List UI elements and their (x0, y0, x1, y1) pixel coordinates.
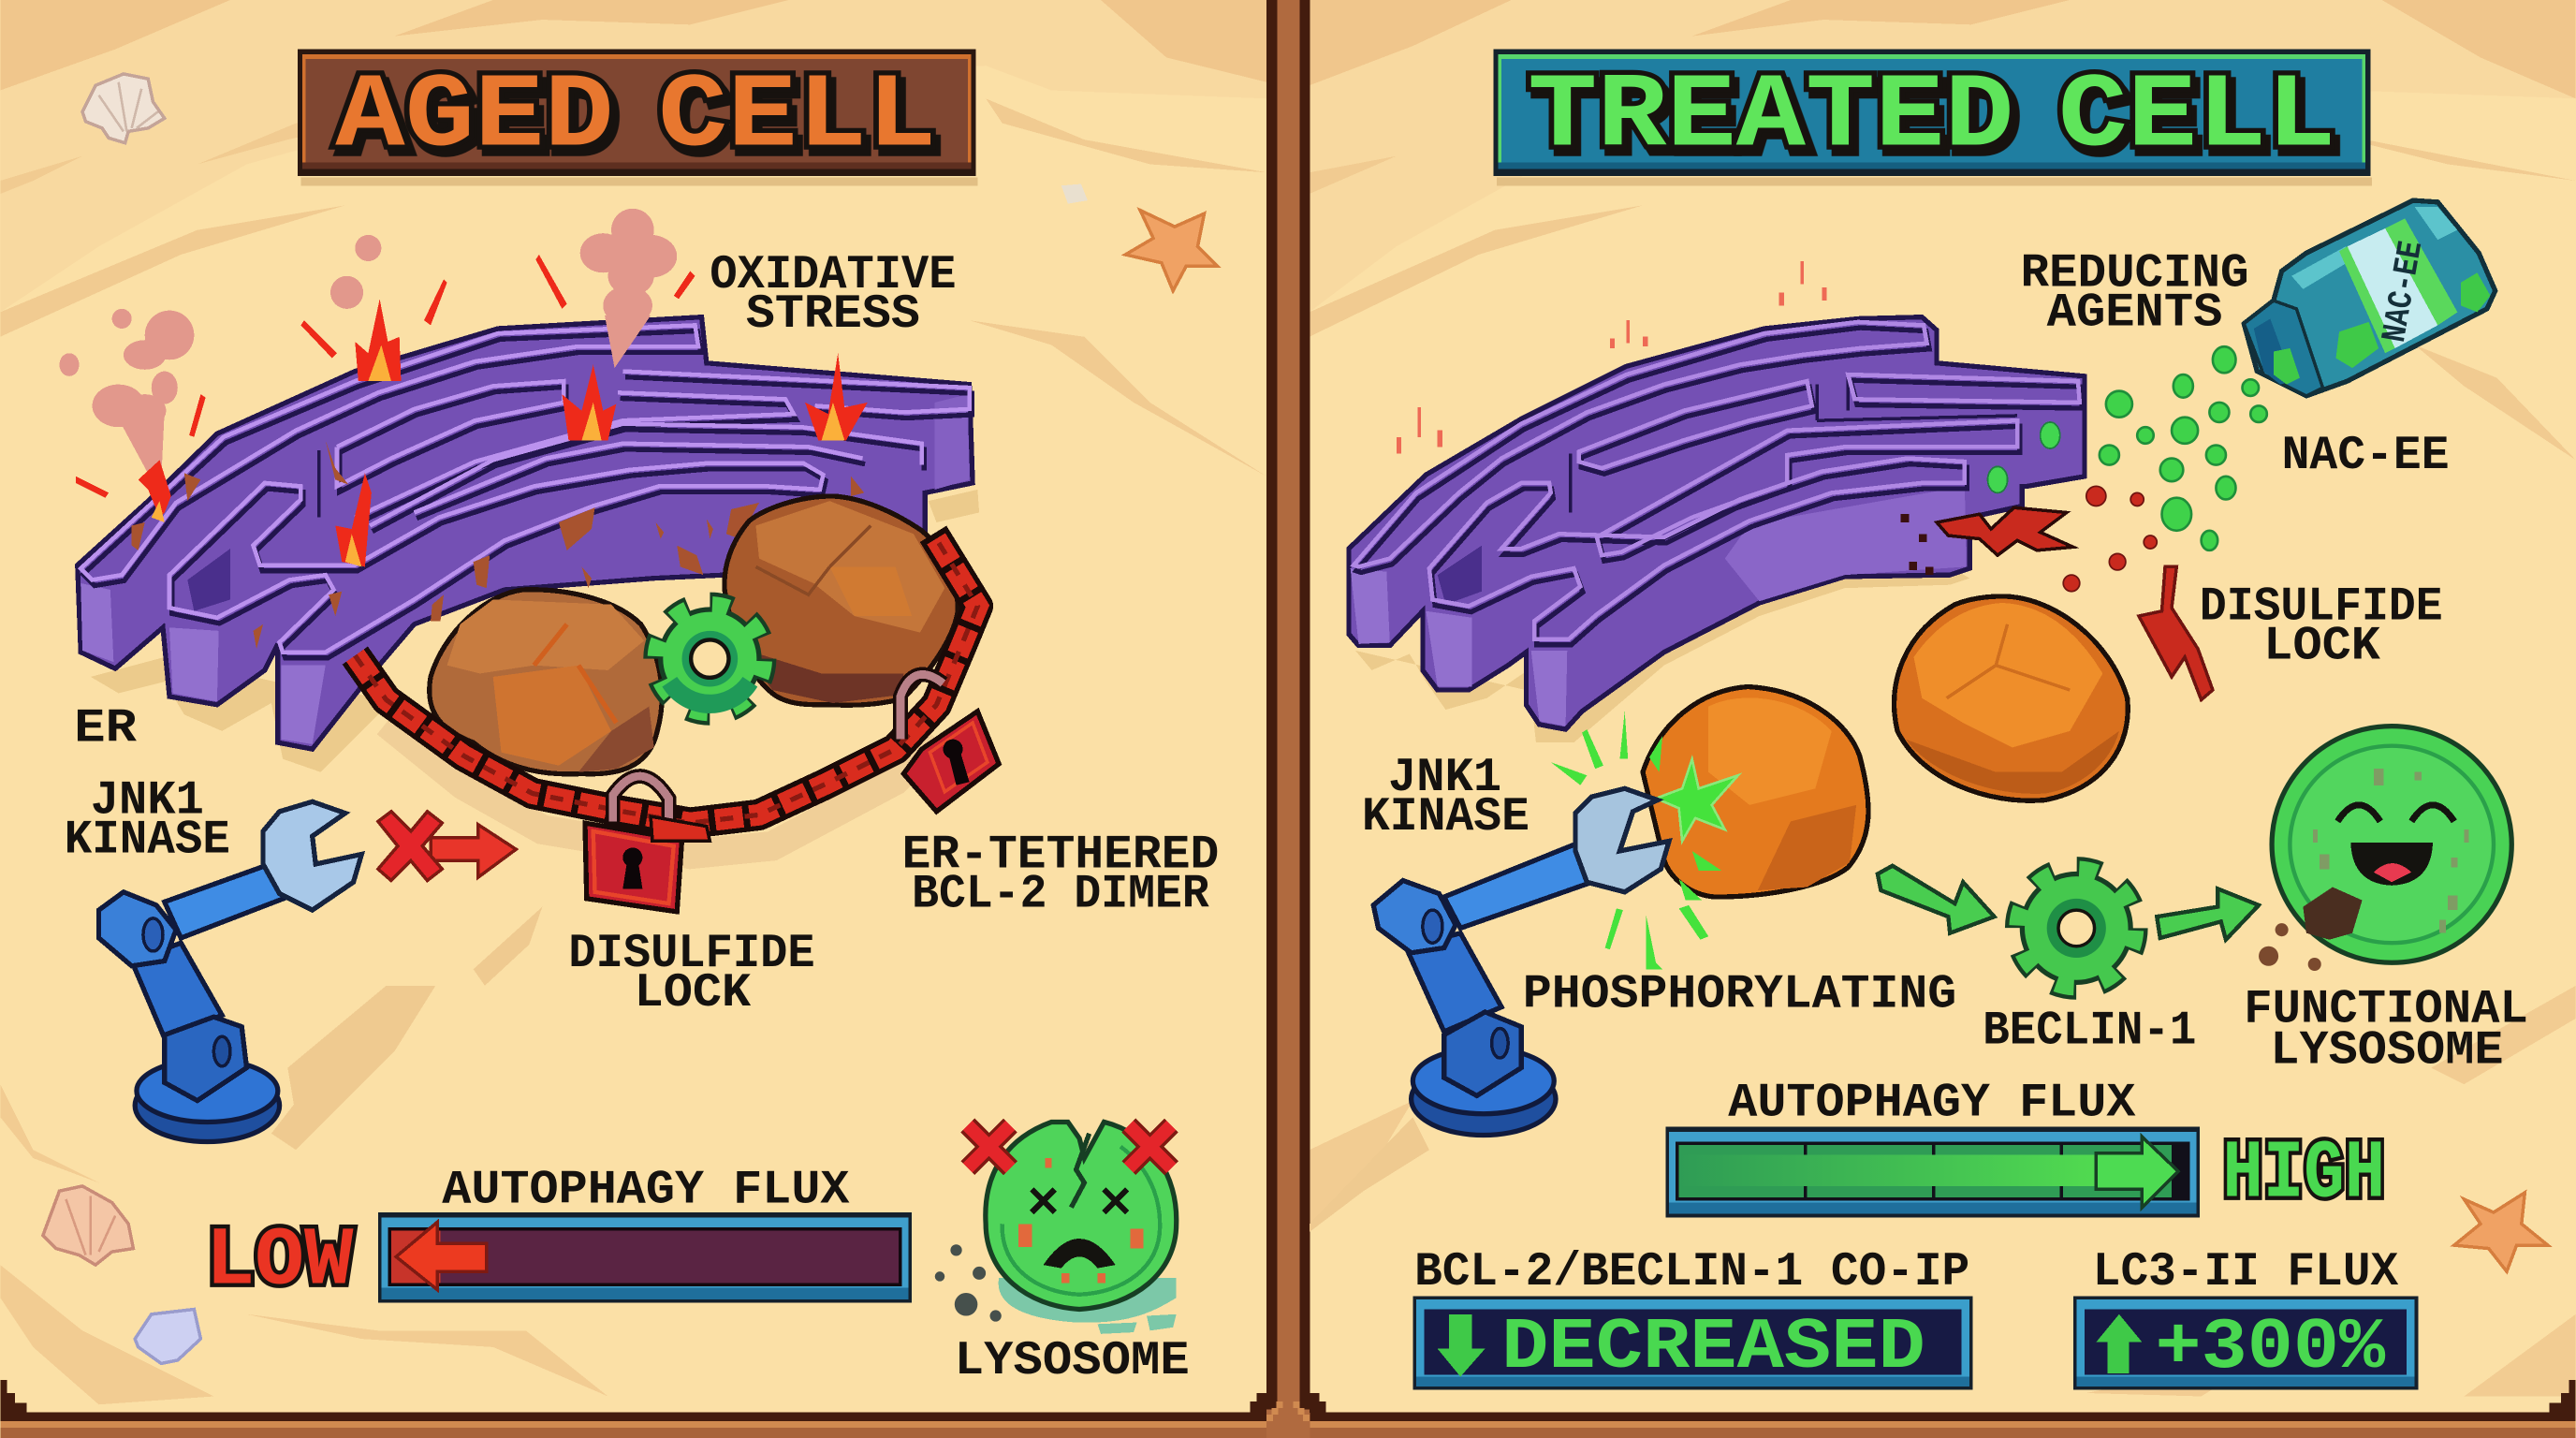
decorations: right panel starfish (2454, 1193, 2548, 1271)
icon: purple seashell (135, 1310, 200, 1363)
label: JNK1 kinase: JNK1 (1388, 752, 1501, 805)
robotic arm: JNK1 kinase right (1310, 788, 1669, 1232)
label: functional lysosome: FUNCTIONAL (2244, 983, 2528, 1036)
broken disulfide lock fragments (1901, 486, 2213, 700)
lysosome body (986, 1122, 1177, 1310)
green phosphorylation burst (1551, 712, 1738, 969)
joint (99, 892, 176, 966)
label: JNK1 kinase: KINASE (1362, 791, 1530, 844)
up arrow (2096, 1314, 2142, 1373)
title: aged cell: AGED CELL (335, 57, 936, 176)
label: JNK1 kinase (1362, 752, 1530, 844)
label: phosphorylating: PHOSPHORYLATING (1523, 969, 1956, 1022)
BCL-2 dimer rocks with gear: aged cell (430, 496, 958, 774)
ER organelle: aged cell (78, 317, 979, 772)
title: treated cell: TREATED CELL (1528, 57, 2336, 176)
functional lysosome (2259, 726, 2511, 971)
autophagy bar: low (378, 1212, 912, 1302)
wrench head (1575, 788, 1669, 892)
labels: aged cell (65, 249, 1219, 1388)
decorations: left panel shells and starfish (43, 74, 1218, 1363)
toxic puddle (999, 1278, 1177, 1334)
low label: LOW (206, 1215, 354, 1308)
smoke plumes (59, 209, 677, 479)
label: reducing agents: AGENTS (2047, 286, 2222, 340)
sparks (76, 255, 695, 498)
robotic arm: JNK1 kinase left (99, 801, 435, 1150)
flames (355, 299, 401, 381)
ER silhouette (1349, 317, 2085, 729)
NAC drops on ER (2041, 422, 2060, 448)
oxidative stress flames and smoke (59, 209, 868, 566)
icon: padlock front (585, 776, 710, 912)
label: autophagy flux: AUTOPHAGY FLUX (442, 1164, 850, 1217)
arm base (1412, 1063, 1556, 1136)
lower link (132, 943, 222, 1038)
low arrow (396, 1223, 487, 1289)
icon: beclin-1 gear (2017, 869, 2135, 988)
debris (2303, 888, 2363, 940)
icon: rock left (430, 590, 662, 774)
metric: lc3-ii flux (2073, 1296, 2418, 1389)
autophagy bar: high (1666, 1127, 2200, 1217)
label: oxidative stress (710, 249, 957, 342)
label: JNK1 kinase: JNK1 (91, 775, 204, 829)
label: reducing agents (2021, 247, 2249, 340)
arm base (135, 1069, 280, 1142)
blocked arrow (378, 812, 516, 881)
bottle neck (2244, 301, 2322, 396)
label: disulfide lock: LOCK (635, 967, 752, 1020)
dead lysosome (935, 1122, 1177, 1334)
label: oxidative stress: OXIDATIVE (710, 249, 957, 302)
high arrow (2096, 1137, 2178, 1208)
metric: co-ip decreased (1412, 1296, 1973, 1389)
ER organelle: treated cell (1349, 317, 2085, 742)
disulfide chain with padlocks (355, 534, 999, 912)
happy eyes (2337, 805, 2454, 821)
upper link (1444, 843, 1592, 928)
ER silhouette (78, 317, 973, 749)
joint (1373, 881, 1456, 953)
dead eyes and mouth (1032, 1189, 1127, 1212)
label: disulfide lock (2200, 581, 2443, 674)
ER prong faces (80, 583, 326, 744)
down arrow (1438, 1314, 1486, 1376)
label: functional lysosome: LYSOSOME (2270, 1024, 2503, 1078)
upper link (165, 862, 287, 938)
label: disulfide lock (568, 928, 815, 1020)
mouth (2350, 843, 2433, 886)
label: reducing agents: REDUCING (2021, 247, 2249, 301)
high label: HIGH (2222, 1128, 2385, 1221)
debris (935, 1244, 1002, 1322)
inner specks (2313, 769, 2469, 933)
label: disulfide lock: LOCK (2263, 621, 2380, 674)
icon: white seashell (82, 74, 165, 143)
ER grooves (1356, 328, 2082, 645)
icon: rock right (724, 496, 958, 705)
bottle highlight (2291, 207, 2457, 289)
label: lc3-ii flux: LC3-II FLUX (2093, 1246, 2399, 1299)
pathway arrow to beclin (1878, 866, 1995, 933)
clevis (1444, 1012, 1521, 1095)
metric: co-ip decreased: DECREASED (1501, 1308, 1925, 1389)
icon: pebble (1061, 184, 1088, 204)
bottle label text: NAC-EE (2376, 238, 2432, 345)
label: disulfide lock: DISULFIDE (2200, 581, 2443, 635)
label: beclin-1: BECLIN-1 (1983, 1005, 2196, 1058)
label: ER-tethered BCL-2 dimer: BCL-2 DIMER (912, 869, 1209, 922)
NAC-EE bottle (2244, 200, 2496, 396)
icon: rock B (1895, 596, 2128, 800)
label: disulfide lock: DISULFIDE (568, 928, 815, 981)
clevis (165, 1017, 247, 1101)
label: ER-tethered BCL-2 dimer: ER-TETHERED (902, 829, 1219, 882)
labels: treated cell (1362, 247, 2528, 1299)
metric: lc3-ii flux: +300% (2155, 1308, 2386, 1389)
icon: starfish top (1125, 211, 1218, 291)
label: oxidative stress: STRESS (746, 288, 920, 342)
label: ER-tethered BCL-2 dimer (902, 829, 1219, 922)
rust spots (132, 440, 864, 649)
icon: rock A (1643, 686, 1868, 897)
BCL-2 rocks: treated cell (1551, 596, 2128, 969)
red x marks (968, 1125, 1171, 1168)
arm shadow (271, 986, 435, 1150)
wrench head (263, 801, 361, 910)
label: JNK1 kinase: KINASE (65, 814, 230, 868)
label: ER: ER (74, 702, 137, 756)
label: functional lysosome (2244, 983, 2528, 1078)
bottle label (2348, 228, 2437, 348)
label: co-ip: BCL-2/BECLIN-1 CO-IP (1414, 1246, 1969, 1299)
label: NAC-EE: NAC-EE (2282, 430, 2450, 483)
icon: padlock right (900, 674, 999, 812)
ER grooves (83, 331, 972, 658)
label: JNK1 kinase (65, 775, 230, 868)
title: aged cell (298, 50, 977, 185)
label: lysosome: LYSOSOME (955, 1335, 1190, 1388)
lysosome body (2272, 726, 2511, 962)
faint sparks above treated ER (1397, 261, 1827, 453)
icon: pink seashell (43, 1186, 133, 1265)
label: autophagy flux: AUTOPHAGY FLUX (1728, 1077, 2136, 1130)
arm shadow (1310, 1117, 1429, 1232)
chain shadow on sand (387, 723, 936, 854)
ER prong faces (1351, 568, 1567, 726)
bottle body (2244, 200, 2496, 396)
chain strap over lock (651, 816, 710, 841)
pathway arrow to lysosome (2157, 888, 2259, 940)
lower link (1406, 933, 1501, 1032)
icon: beclin gear (655, 605, 764, 713)
green NAC-EE drops (2100, 346, 2267, 550)
